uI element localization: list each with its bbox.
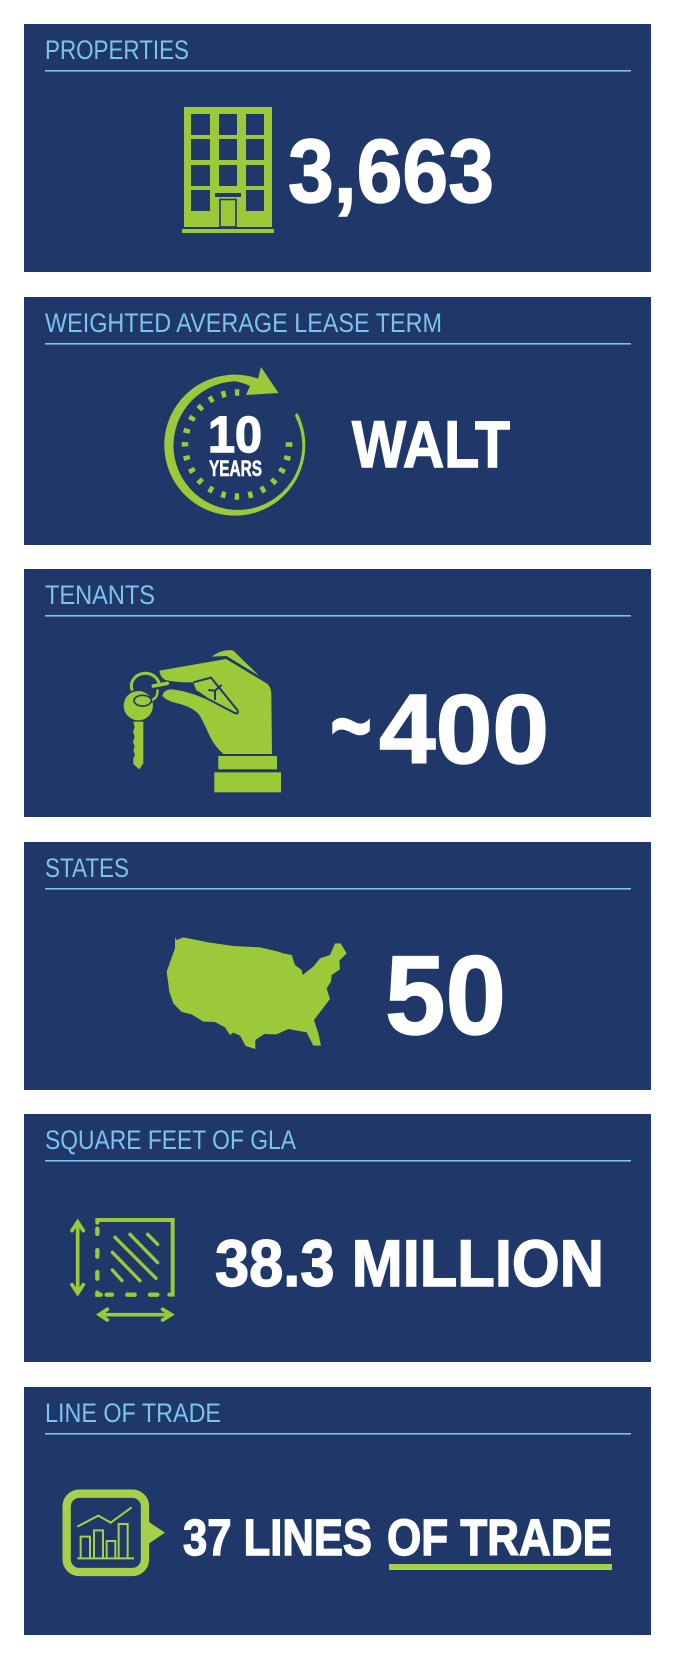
icon: map of the United States (167, 937, 347, 1049)
panel: square feet of GLA (24, 1114, 651, 1362)
icon: ten year clock: 10 (208, 406, 262, 463)
icon: floor area square with arrows (72, 1220, 173, 1320)
value: ~400: 400 (379, 674, 549, 784)
icon: speech bubble chart (67, 1494, 165, 1572)
value: 50: 50 (385, 933, 506, 1058)
icon: ten year clock (164, 367, 305, 516)
panel: properties (24, 24, 651, 272)
value: 38.3 million: 38.3 MILLION (215, 1226, 604, 1300)
heading: weighted average lease term: WEIGHTED AVERAGE LEASE TERM (45, 308, 442, 338)
heading: square feet of GLA: SQUARE FEET OF GLA (45, 1125, 296, 1155)
panel: weighted average lease term (24, 297, 651, 545)
heading: states: STATES (45, 853, 129, 883)
panel: states (24, 842, 651, 1090)
value: WALT: WALT (352, 407, 510, 481)
heading: tenants: TENANTS (45, 580, 155, 610)
heading: properties: PROPERTIES (45, 35, 189, 65)
value: 37 lines of trade (183, 1509, 612, 1570)
panel: line of trade (24, 1387, 651, 1635)
panel: tenants (24, 569, 651, 817)
value: 37 lines of trade: OF TRADE (387, 1509, 612, 1566)
icon: hand holding key (124, 650, 281, 792)
icon: building (182, 107, 274, 233)
icon: ten year clock: YEARS (209, 456, 262, 481)
value: 37 lines of trade: 37 LINES (183, 1509, 372, 1566)
heading: line of trade: LINE OF TRADE (45, 1398, 221, 1428)
value: ~400: ~ (330, 670, 372, 782)
value: 3,663: 3,663 (288, 122, 494, 222)
